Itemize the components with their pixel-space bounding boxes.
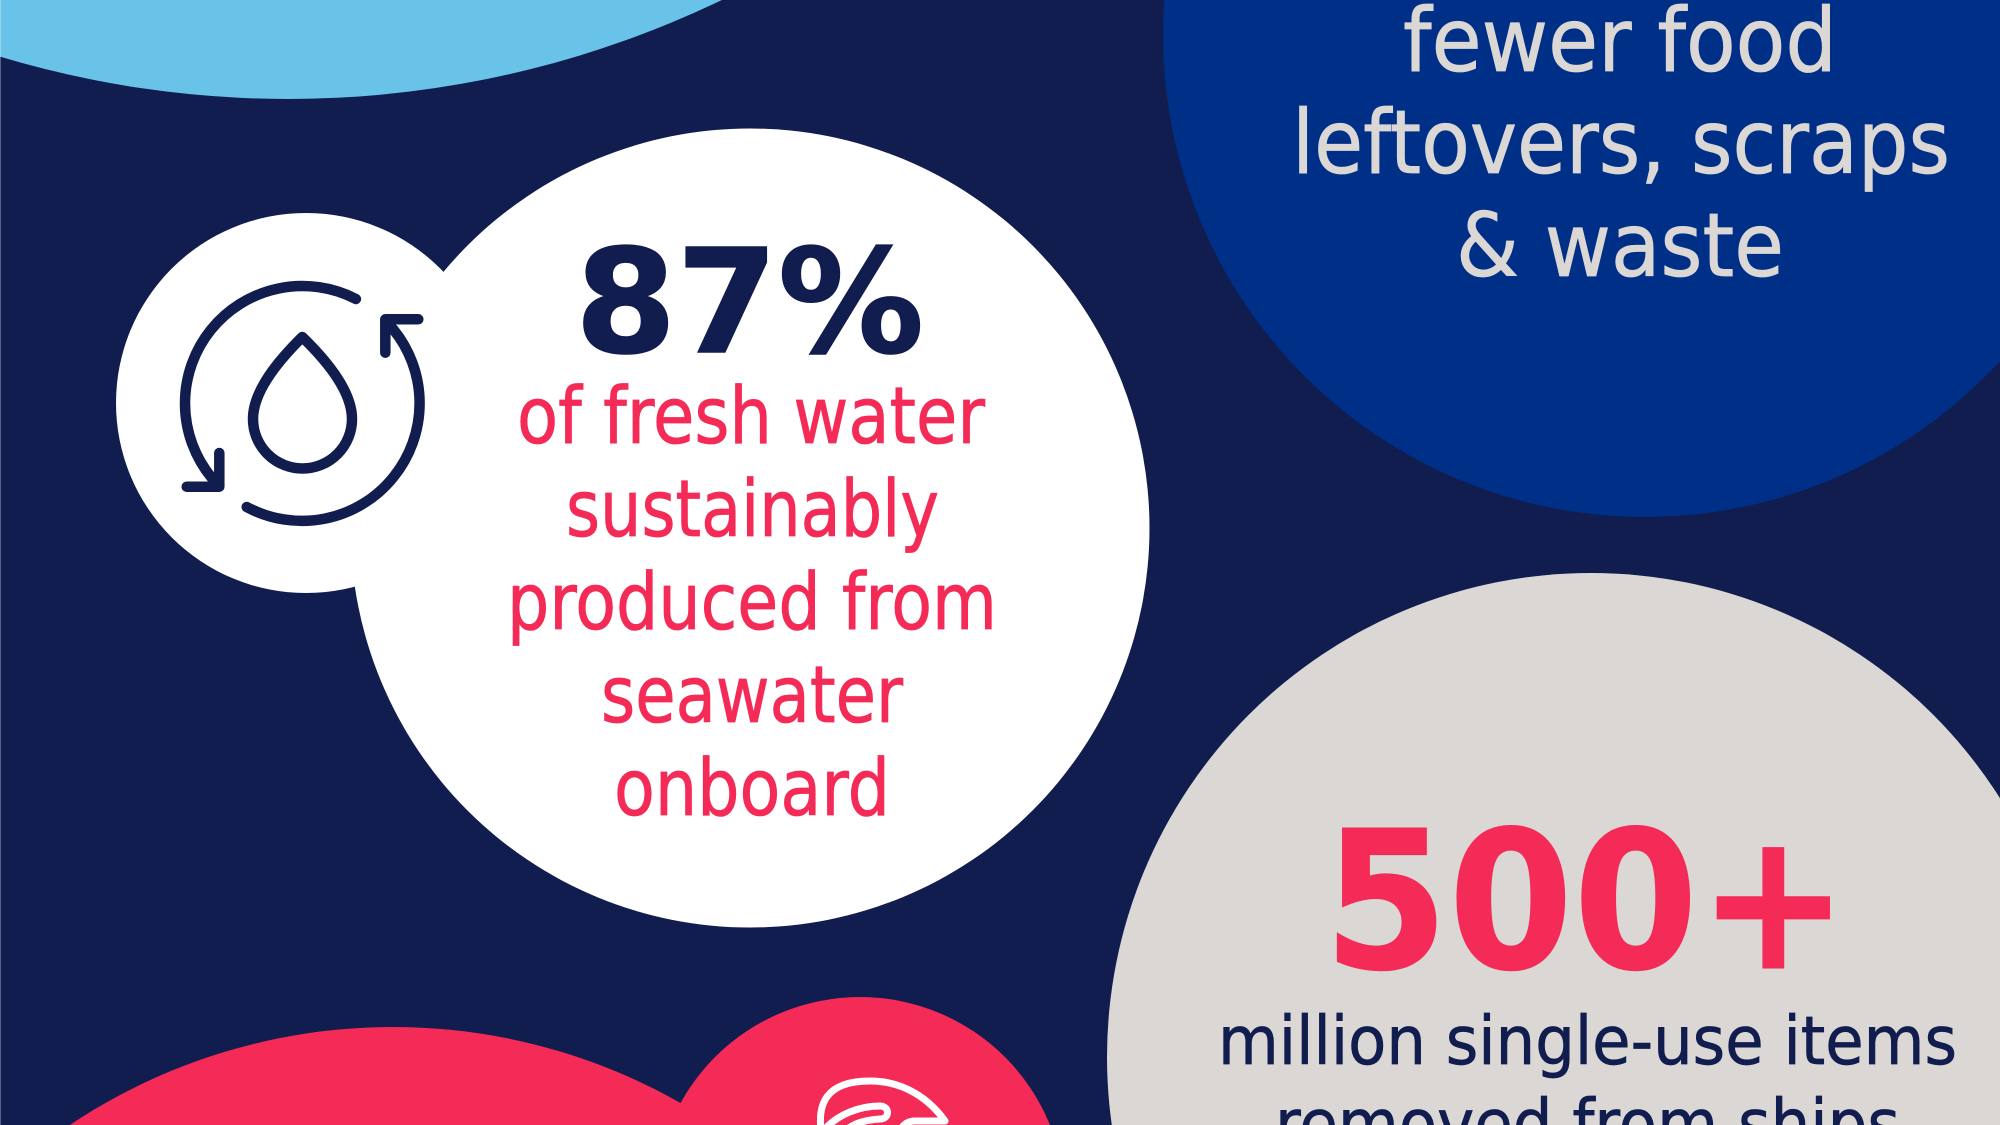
fresh water description: sustainably — [566, 465, 939, 555]
panel: single-use items — [1107, 573, 2000, 1125]
panel: fresh water — [116, 128, 1150, 928]
stat: 500+: 500+ — [1324, 791, 1848, 1014]
food waste text: leftovers, scraps — [1292, 91, 1950, 194]
stat: 87%: 87% — [575, 218, 924, 386]
icon: white outline shape — [820, 1081, 945, 1125]
food waste text — [1292, 0, 1950, 297]
panel: red bottom circles — [0, 997, 1065, 1125]
food waste text: & waste — [1456, 194, 1784, 297]
fresh water description: seawater — [601, 651, 904, 741]
icon: water drop with recycling arrows — [185, 286, 420, 521]
light blue circle top left — [0, 0, 1288, 99]
fresh water description — [507, 372, 997, 834]
fresh water description: produced from — [507, 558, 997, 648]
fresh water description: of fresh water — [517, 372, 986, 462]
fresh water description: onboard — [614, 744, 890, 834]
single-use description — [1218, 1002, 1957, 1125]
panel: food waste — [1163, 0, 2000, 517]
single-use description: million single-use items — [1218, 1002, 1957, 1080]
